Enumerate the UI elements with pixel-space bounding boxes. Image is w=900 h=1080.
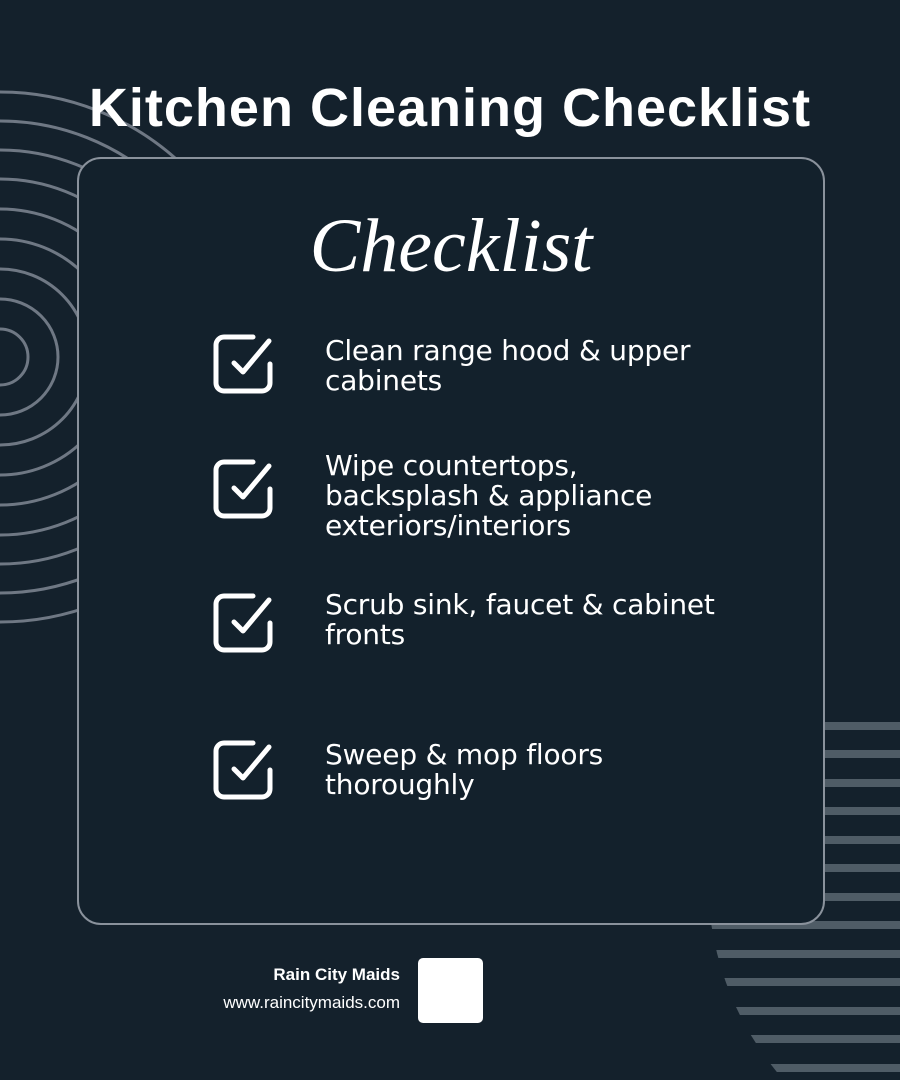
panel: checklist [77,157,825,925]
text: item 4: thoroughly [325,768,474,801]
text: item 2: Wipe countertops, [325,449,577,482]
text: item 4: Sweep & mop floors [325,738,603,771]
footer: brand: www.raincitymaids.com [223,993,400,1012]
text: item 3: Scrub sink, faucet & cabinet [325,588,715,621]
icon: checkbox 2 [214,460,272,518]
text: item 2: backsplash & appliance [325,479,652,512]
text: item 1: Clean range hood & upper [325,334,690,367]
heading: Checklist: Checklist [310,204,592,288]
logo placeholder [418,958,483,1023]
text: item 1 [325,334,690,397]
text: item 3 [325,588,715,651]
footer: brand [223,965,400,1012]
icon: checkbox 4 [214,740,272,800]
footer: brand: Rain City Maids [273,965,400,984]
icon: checkbox 3 [214,594,272,652]
text: item 3: fronts [325,618,405,651]
text: item 2 [325,449,652,542]
text: item 1: cabinets [325,364,442,397]
text: item 4 [325,738,603,801]
icon: checkbox 1 [214,334,272,394]
text: item 2: exteriors/interiors [325,509,571,542]
title: Kitchen Cleaning Checklist [89,78,811,138]
